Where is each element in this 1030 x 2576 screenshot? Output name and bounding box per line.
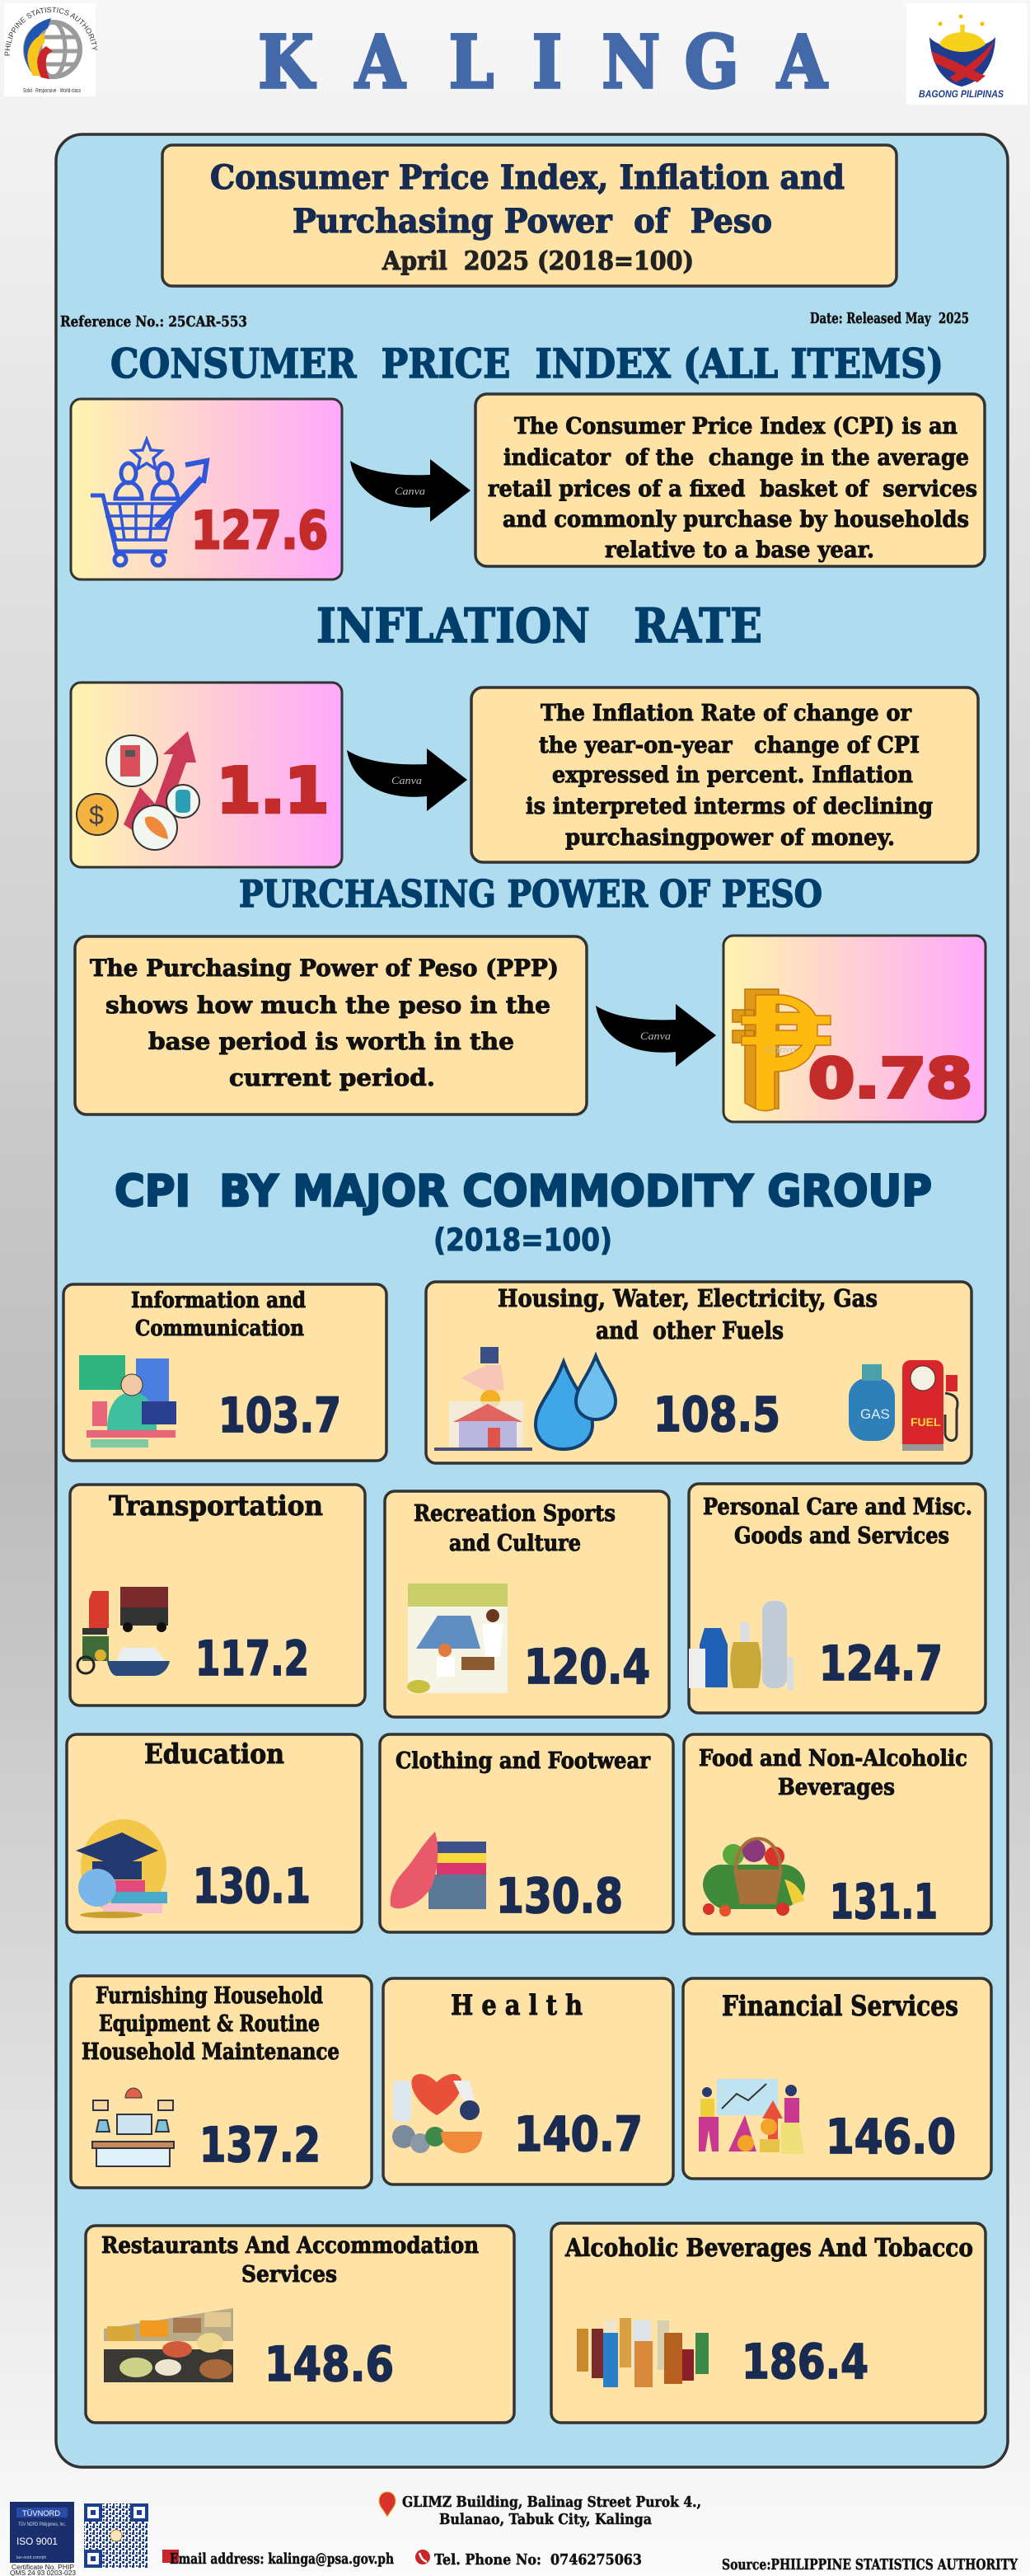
title box: April 2025 (2018=100) — [382, 246, 694, 276]
panel: housing, water, electricity: Housing, Water, Electricity, Gas — [498, 1284, 878, 1312]
panel: health: H e a l t h — [451, 1989, 583, 2022]
panel: restaurants and accommodation: Restaurants And Accommodation — [101, 2233, 479, 2259]
panel: financial services: Financial Services — [722, 1990, 958, 2023]
logo: Philippine Statistics Authority: Solid · Responsive · World-class — [23, 88, 81, 94]
panel: information and communication: 103.7 — [218, 1387, 341, 1443]
panel: furnishing household — [71, 1976, 372, 2188]
panel: furnishing household: Furnishing Household — [96, 1983, 323, 2009]
icon: cap and books — [76, 1819, 167, 1918]
panel: CPI value — [71, 399, 342, 579]
panel: alcoholic beverages and tobacco: 186.4 — [742, 2334, 868, 2390]
panel: education: Education — [144, 1738, 284, 1770]
panel: clothing and footwear: Clothing and Footwear — [396, 1748, 651, 1774]
panel: PPP value — [723, 936, 986, 1122]
panel: food and non-alcoholic beverages — [684, 1734, 991, 1934]
panel: personal care: Personal Care and Misc. — [703, 1494, 972, 1520]
panel: personal care: Goods and Services — [734, 1523, 949, 1549]
text box: inflation definition: expressed in percent. Inflation — [552, 762, 913, 788]
badge: ISO 9001: Certificate No. PHIP — [12, 2564, 74, 2571]
panel: furnishing household: Equipment & Routine — [99, 2011, 320, 2037]
panel: inflation value — [71, 683, 342, 867]
panel: alcoholic beverages and tobacco — [551, 2223, 986, 2423]
icon: toiletries — [689, 1601, 794, 1690]
icon: inflation arrow and goods: $ — [89, 800, 104, 830]
panel: food and non-alcoholic beverages: 131.1 — [830, 1874, 938, 1930]
panel: financial services: 146.0 — [826, 2109, 956, 2165]
icon: food platters — [104, 2308, 233, 2382]
logo: Philippine Statistics Authority: PHILIPPINE STATISTICS AUTHORITY — [5, 7, 97, 56]
panel: health — [383, 1978, 673, 2184]
icon: vegetable basket — [703, 1838, 805, 1917]
arrow — [347, 748, 467, 811]
icon: inflation arrow and goods — [77, 731, 199, 850]
heading: purchasing power of peso: PURCHASING POWER OF PESO — [239, 872, 822, 916]
title: Kalinga: KALINGA — [258, 19, 828, 105]
icon: shoe and clothes — [391, 1832, 486, 1909]
badge: ISO 9001: tuv-nord.com/ph — [16, 2555, 46, 2560]
icon: person at laptop — [79, 1355, 176, 1448]
panel: restaurants and accommodation — [86, 2226, 514, 2423]
logo: Philippine Statistics Authority — [4, 3, 97, 96]
panel: personal care — [689, 1484, 986, 1713]
panel: clothing and footwear — [380, 1734, 673, 1932]
icon: peso sign: Canva — [766, 1043, 797, 1055]
badge: ISO 9001: TÜV NORD Philippines, Inc. — [18, 2522, 66, 2527]
icon: furniture — [92, 2088, 174, 2166]
icon: map pin — [379, 2492, 396, 2517]
text box: CPI definition: retail prices of a fixed basket of services — [488, 476, 977, 502]
footer: address: GLIMZ Building, Balinag Street Purok 4., — [402, 2494, 701, 2511]
arrow — [350, 459, 471, 522]
text box: inflation definition — [471, 687, 978, 862]
text box: CPI definition: relative to a base year. — [605, 537, 874, 563]
icon: gas tank — [849, 1364, 895, 1441]
base year: (2018=100) — [433, 1222, 612, 1258]
footer: address: Bulanao, Tabuk City, Kalinga — [439, 2511, 652, 2528]
panel: housing, water, electricity: 108.5 — [653, 1387, 780, 1443]
panel: transportation: Transportation — [109, 1490, 323, 1522]
logo: Bagong Pilipinas: BAGONG PILIPINAS — [919, 88, 1004, 100]
panel: financial services — [683, 1978, 991, 2179]
panel: personal care: 124.7 — [819, 1635, 943, 1692]
panel: education: 130.1 — [193, 1858, 311, 1914]
text box: CPI definition: indicator of the change in the average — [503, 445, 969, 471]
panel: restaurants and accommodation: Services — [241, 2262, 337, 2287]
text box: PPP definition: current period. — [229, 1064, 435, 1091]
heading: inflation rate: INFLATION RATE — [316, 598, 762, 654]
text box: CPI definition: The Consumer Price Index (CPI) is an — [514, 414, 957, 439]
panel: recreation sports and culture — [385, 1491, 669, 1717]
panel: information and communication: Communication — [135, 1316, 304, 1341]
panel: health: 140.7 — [514, 2106, 643, 2162]
badge: ISO 9001 — [10, 2502, 77, 2576]
panel: food and non-alcoholic beverages: Beverages — [778, 1775, 895, 1800]
icon: house — [434, 1347, 532, 1451]
panel: recreation sports and culture: 120.4 — [524, 1639, 650, 1695]
icon: gas tank: GAS — [860, 1406, 890, 1422]
badge: ISO 9001: ISO 9001 — [16, 2536, 58, 2547]
heading: CPI by major commodity group: CPI BY MAJOR COMMODITY GROUP — [115, 1166, 932, 1217]
arrow: Canva — [640, 1030, 672, 1042]
QR code — [84, 2503, 148, 2568]
icon: peso sign — [733, 989, 831, 1111]
footer: email: Email address: kalinga@psa.gov.ph — [170, 2550, 394, 2568]
icon: water drops — [536, 1356, 616, 1449]
footer: address — [379, 2492, 701, 2528]
panel: education — [67, 1734, 362, 1932]
title box — [162, 145, 897, 286]
reference number: Reference No.: 25CAR-553 — [60, 313, 247, 331]
panel: alcoholic beverages and tobacco: Alcoholic Beverages And Tobacco — [564, 2234, 973, 2263]
text box: inflation definition: is interpreted interms of declining — [526, 794, 933, 819]
panel: clothing and footwear: 130.8 — [496, 1868, 623, 1924]
text box: inflation definition: purchasingpower of money. — [565, 825, 895, 851]
panel: transportation — [70, 1485, 365, 1706]
text box: inflation definition: The Inflation Rate of change or — [541, 701, 912, 726]
icon: vehicles — [77, 1587, 170, 1676]
panel: recreation sports and culture: Recreation Sports — [414, 1501, 616, 1527]
icon: shopping cart — [91, 439, 207, 565]
icon: fuel pump — [902, 1360, 957, 1451]
title box: Consumer Price Index, Inflation and — [210, 158, 845, 197]
panel: food and non-alcoholic beverages: Food and Non-Alcoholic — [699, 1746, 967, 1771]
arrow: Canva — [395, 485, 426, 497]
panel: housing, water, electricity — [426, 1282, 971, 1463]
panel: transportation: 117.2 — [195, 1631, 309, 1687]
panel: information and communication — [63, 1284, 386, 1461]
arrow: Canva — [391, 774, 423, 786]
text box: PPP definition — [75, 936, 587, 1114]
value: CPI: 127.6 — [191, 500, 328, 561]
text box: PPP definition: base period is worth in the — [148, 1028, 514, 1055]
footer: telephone: Tel. Phone No: 0746275063 — [434, 2551, 642, 2569]
value: PPP: 0.78 — [808, 1047, 972, 1110]
icon: campers — [407, 1584, 508, 1693]
value: inflation rate: 1.1 — [217, 754, 329, 827]
text box: CPI definition: and commonly purchase by households — [503, 507, 969, 533]
icon: heart and fitness — [392, 2074, 482, 2153]
text box: CPI definition — [475, 394, 985, 566]
icon: fuel pump: FUEL — [911, 1415, 941, 1429]
text box: PPP definition: The Purchasing Power of Peso (PPP) — [90, 955, 559, 982]
heading: consumer price index: CONSUMER PRICE INDEX (ALL ITEMS) — [110, 340, 943, 387]
panel: recreation sports and culture: and Culture — [449, 1531, 581, 1556]
title box: Purchasing Power of Peso — [293, 202, 772, 241]
panel: restaurants and accommodation: 148.6 — [265, 2336, 394, 2392]
arrow — [596, 1004, 716, 1067]
logo: Bagong Pilipinas — [906, 3, 1028, 105]
release date: Date: Released May 2025 — [810, 310, 969, 327]
panel: housing, water, electricity: and other Fuels — [596, 1316, 784, 1344]
panel: information and communication: Information and — [131, 1288, 306, 1313]
panel: furnishing household: Household Maintenance — [82, 2039, 339, 2065]
panel: furnishing household: 137.2 — [199, 2117, 321, 2173]
icon: people with chart — [699, 2079, 804, 2154]
icon: bottles — [577, 2318, 709, 2387]
text box: PPP definition: shows how much the peso in the — [105, 992, 550, 1019]
badge: ISO 9001: TÜVNORD — [22, 2509, 61, 2517]
text box: inflation definition: the year-on-year change of CPI — [539, 733, 920, 758]
